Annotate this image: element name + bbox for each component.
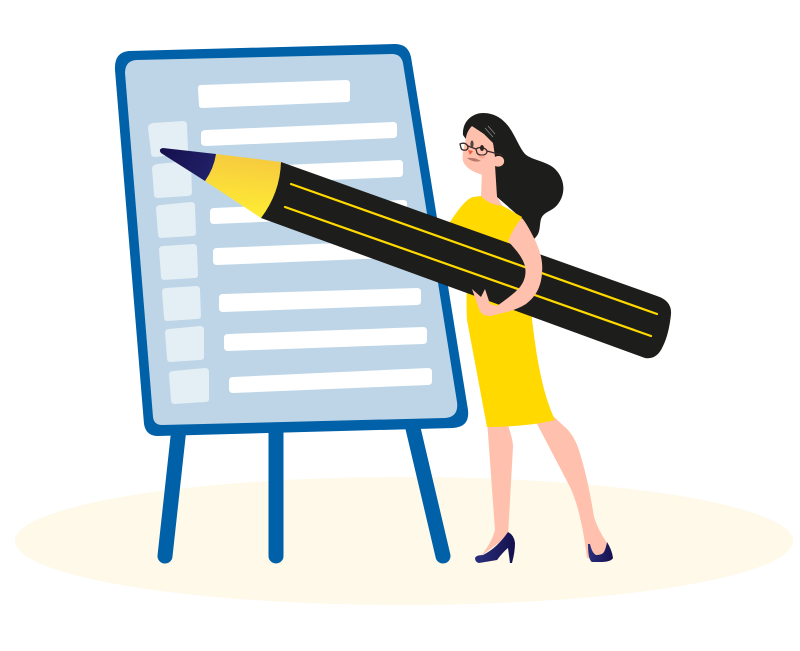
face (463, 126, 504, 175)
arm and hand over pencil (472, 218, 542, 316)
ground ellipse (15, 477, 793, 605)
easel legs (165, 424, 443, 556)
eyes, nose, cheek and mouth (467, 140, 485, 162)
pencil body (261, 162, 671, 358)
pencil wood (205, 154, 281, 218)
right leg (535, 416, 608, 558)
left leg (481, 420, 513, 556)
woman (450, 113, 613, 563)
hair strands (485, 126, 495, 137)
board title bar (198, 80, 350, 108)
yellow dress (450, 196, 555, 427)
hair fringe (472, 116, 501, 152)
checklist board (115, 44, 468, 436)
pencil lead tip (160, 148, 216, 181)
right shoe (588, 542, 613, 562)
checklist text bars (201, 122, 432, 393)
hair back (463, 113, 563, 239)
left shoe (475, 532, 515, 563)
neck (481, 165, 505, 210)
glasses (460, 143, 502, 155)
pencil stripes (285, 184, 657, 336)
giant pencil (160, 148, 671, 358)
checkboxes (148, 121, 209, 404)
